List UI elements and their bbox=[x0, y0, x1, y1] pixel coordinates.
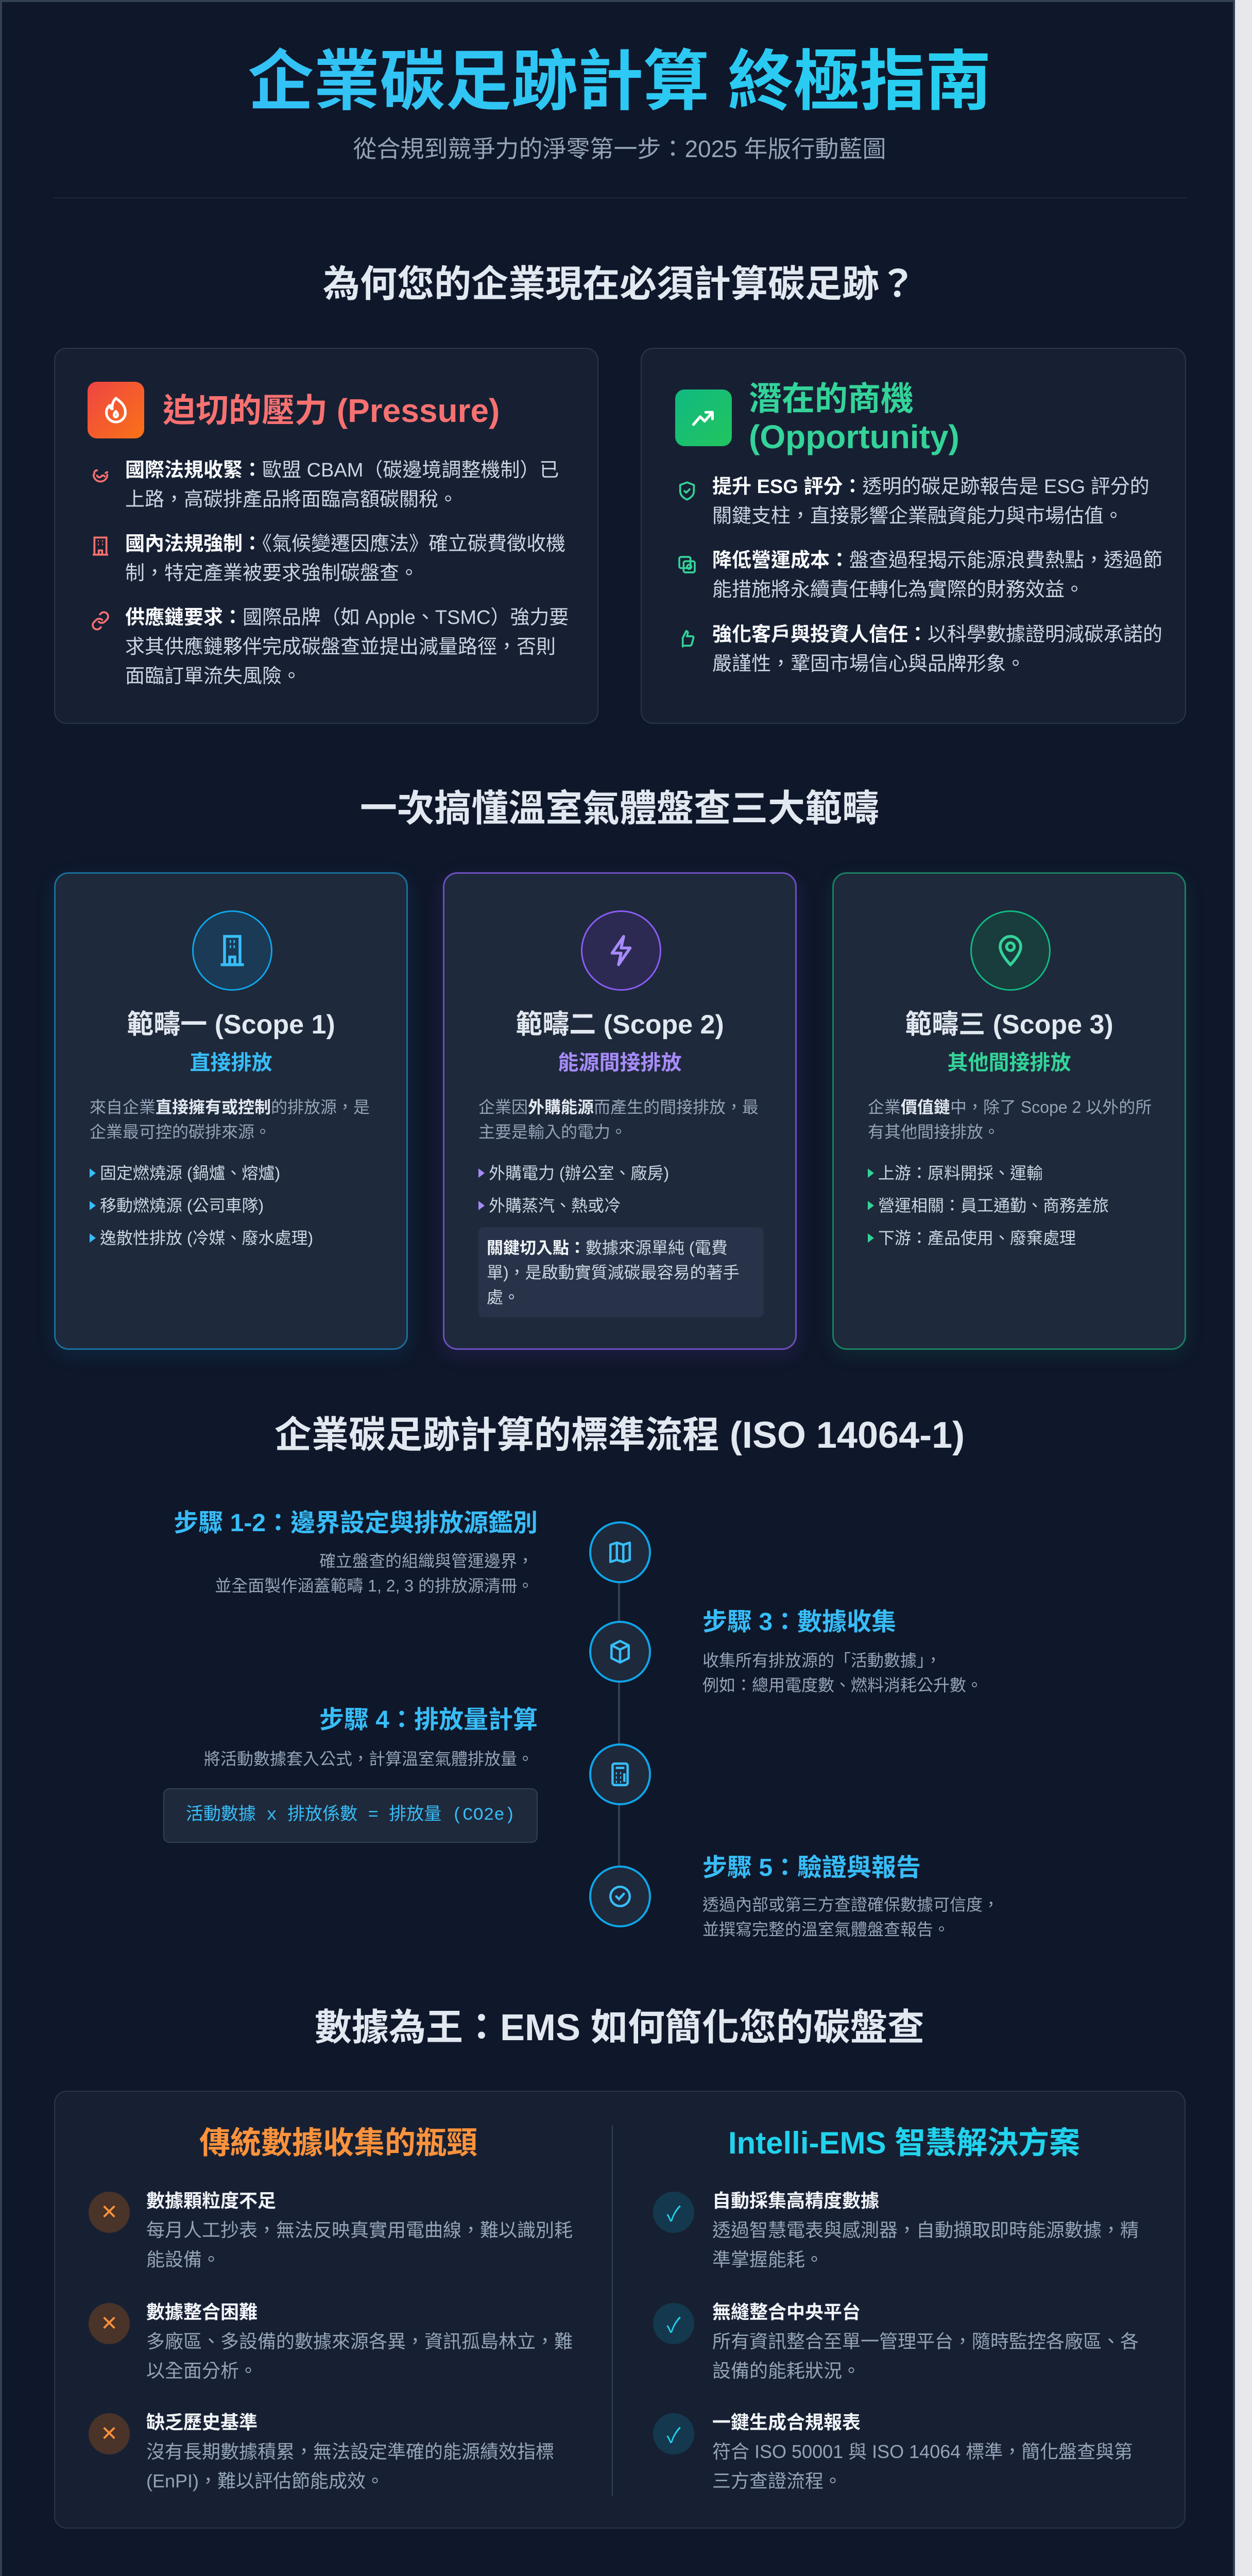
formula box bbox=[163, 1788, 538, 1843]
panel title: (Opportunity) bbox=[749, 418, 959, 455]
item: trust: 強化客戶與投資人信任：以科學數據證明減碳承諾的嚴謹性，鞏固市場信心與品牌形象。 bbox=[712, 624, 1162, 675]
bottleneck 2: ✕ bbox=[100, 2312, 118, 2335]
bottleneck 3 bbox=[89, 2412, 554, 2492]
panel: EMS comparison bbox=[54, 2091, 1186, 2529]
scope 1 bullets: 固定燃燒源 (鍋爐、熔爐) bbox=[100, 1164, 280, 1182]
solution 3: 一鍵生成合規報表 bbox=[712, 2412, 861, 2433]
bottleneck 3: 缺乏歷史基準 bbox=[146, 2412, 258, 2433]
item: domestic: 國內法規強制：《氣候變遷因應法》確立碳費徵收機制，特定產業被要求強制碳盤查。 bbox=[125, 533, 565, 584]
step 5: 透過內部或第三方查證確保數據可信度， bbox=[702, 1895, 999, 1914]
panel title bbox=[749, 380, 959, 455]
panel: scope 1: 直接排放 bbox=[190, 1052, 272, 1074]
scope 2 bullets: 外購蒸汽、熱或冷 bbox=[489, 1196, 621, 1215]
bottleneck 2: 多廠區、多設備的數據來源各異，資訊孤島林立，難以全面分析。 bbox=[146, 2331, 573, 2381]
subtitle: 從合規到競爭力的淨零第一步：2025 年版行動藍圖 bbox=[353, 135, 886, 162]
scope 1 title: 範疇一 (Scope 1) bbox=[127, 1010, 335, 1040]
item: international: 國際法規收緊：歐盟 CBAM（碳邊境調整機制）已上路，高碳排產品將面臨高額碳關稅。 bbox=[125, 460, 559, 511]
solution 1: 透過智慧電表與感測器，自動擷取即時能源數據，精準掌握能耗。 bbox=[712, 2219, 1139, 2270]
panel: scope 2 bbox=[443, 872, 797, 1350]
left title: 傳統數據收集的瓶頸 bbox=[199, 2126, 477, 2160]
solution 1: ✓ bbox=[666, 2203, 681, 2226]
heading: why: 為何您的企業現在必須計算碳足跡？ bbox=[323, 264, 916, 305]
step 3: 收集所有排放源的「活動數據」， bbox=[702, 1651, 941, 1670]
step 1-2: 確立盤查的組織與管運邊界， bbox=[319, 1552, 534, 1570]
solution 2: 所有資訊整合至單一管理平台，隨時監控各廠區、各設備的能耗狀況。 bbox=[712, 2331, 1139, 2381]
bottleneck 1: 每月人工抄表，無法反映真實用電曲線，難以識別耗能設備。 bbox=[146, 2219, 573, 2270]
step 3: 例如：總用電度數、燃料消耗公升數。 bbox=[702, 1676, 983, 1694]
panel: scope 3 bbox=[832, 872, 1186, 1350]
scope 2 bullets bbox=[478, 1164, 669, 1215]
icon: trend up bbox=[675, 389, 732, 446]
panel: scope 1: 來自企業直接擁有或控制的排放源，是企業最可控的碳排來源。 bbox=[90, 1098, 370, 1141]
panel title: 潛在的商機 bbox=[749, 380, 914, 417]
bottleneck 1 bbox=[89, 2190, 573, 2270]
heading: scopes: 一次搞懂溫室氣體盤查三大範疇 bbox=[360, 788, 879, 829]
icon: lightning bbox=[581, 910, 661, 991]
icon: building bbox=[192, 910, 272, 991]
heading: EMS: 數據為王：EMS 如何簡化您的碳盤查 bbox=[315, 2007, 924, 2048]
solution 3: ✓ bbox=[666, 2425, 681, 2447]
node 4: check bbox=[589, 1866, 651, 1927]
panel: scope 2: 能源間接排放 bbox=[558, 1052, 682, 1074]
scope 2 title: 範疇二 (Scope 2) bbox=[516, 1010, 724, 1040]
icon: fire bbox=[88, 382, 144, 438]
solution 2: 無縫整合中央平台 bbox=[712, 2301, 861, 2323]
step 1-2 bbox=[174, 1510, 538, 1595]
step 5: 步驟 5：驗證與報告 bbox=[702, 1854, 921, 1882]
panel: opportunity bbox=[641, 348, 1186, 724]
solution 3: 符合 ISO 50001 與 ISO 14064 標準，簡化盤查與第三方查證流程。 bbox=[712, 2441, 1133, 2492]
bottleneck 2: 數據整合困難 bbox=[146, 2301, 258, 2323]
node 2: box bbox=[589, 1621, 651, 1683]
scope 3 bullets: 營運相關：員工通勤、商務差旅 bbox=[878, 1196, 1109, 1215]
scope 1 bullets: 逸散性排放 (冷媒、廢水處理) bbox=[100, 1229, 313, 1247]
solution 2: ✓ bbox=[666, 2314, 681, 2337]
timeline bbox=[589, 1521, 651, 1927]
item: ESG: 提升 ESG 評分：透明的碳足跡報告是 ESG 評分的關鍵支柱，直接影響企業融資能力與市場估值。 bbox=[712, 476, 1150, 527]
scope 2 bullets: 外購電力 (辦公室、廠房) bbox=[489, 1164, 669, 1182]
solution 3 bbox=[653, 2412, 1133, 2492]
step 4: 步驟 4：排放量計算 bbox=[319, 1706, 538, 1734]
panel: scope 3: 企業價值鏈中，除了 Scope 2 以外的所有其他間接排放。 bbox=[868, 1098, 1152, 1141]
item: supply chain: 供應鏈要求：國際品牌（如 Apple、TSMC）強力要求其供應鏈夥伴完成碳盤查並提出減量路徑，否則面臨訂單流失風險。 bbox=[125, 607, 569, 687]
panel: scope 3: 其他間接排放 bbox=[948, 1052, 1071, 1074]
panel: scope 2: 企業因外購能源而產生的間接排放，最主要是輸入的電力。 bbox=[478, 1098, 759, 1141]
step 5: 並撰寫完整的溫室氣體盤查報告。 bbox=[702, 1920, 950, 1939]
bottleneck 1: ✕ bbox=[100, 2201, 118, 2224]
panel: scope 1 bbox=[54, 872, 408, 1350]
step 5 bbox=[702, 1854, 999, 1939]
right title: Intelli-EMS 智慧解決方案 bbox=[728, 2126, 1080, 2160]
node 3: calculator bbox=[589, 1743, 651, 1805]
bottleneck 2 bbox=[89, 2301, 573, 2381]
scope 1 bullets: 移動燃燒源 (公司車隊) bbox=[100, 1196, 264, 1215]
title bbox=[2, 46, 1237, 117]
step 4: 將活動數據套入公式，計算溫室氣體排放量。 bbox=[204, 1750, 534, 1768]
callout: key entry point: 關鍵切入點：數據來源單純 (電費單)，是啟動實質減碳最容易的著手處。 bbox=[487, 1239, 740, 1307]
step 3 bbox=[702, 1608, 983, 1694]
scope 3 title: 範疇三 (Scope 3) bbox=[905, 1010, 1113, 1040]
bottleneck 1: 數據顆粒度不足 bbox=[146, 2190, 276, 2211]
scope 3 bullets bbox=[868, 1164, 1109, 1247]
solution 2 bbox=[653, 2301, 1139, 2381]
bottleneck 3: 沒有長期數據積累，無法設定準確的能源績效指標 (EnPI)，難以評估節能成效。 bbox=[146, 2441, 554, 2492]
scope 3 bullets: 上游：原料開採、運輸 bbox=[878, 1164, 1043, 1182]
solution 1: 自動採集高精度數據 bbox=[712, 2190, 879, 2211]
callout: key entry point bbox=[478, 1227, 764, 1317]
bottleneck 3: ✕ bbox=[100, 2422, 118, 2445]
panel title: 迫切的壓力 (Pressure) bbox=[163, 392, 500, 429]
step 1-2: 並全面製作涵蓋範疇 1, 2, 3 的排放源清冊。 bbox=[215, 1577, 534, 1595]
item: cost: 降低營運成本：盤查過程揭示能源浪費熱點，透過節能措施將永續責任轉化為實際的財務效益。 bbox=[712, 550, 1162, 601]
solution 1 bbox=[653, 2190, 1139, 2270]
step 1-2: 步驟 1-2：邊界設定與排放源鑑別 bbox=[174, 1510, 538, 1537]
panel: pressure bbox=[54, 348, 598, 724]
step 3: 步驟 3：數據收集 bbox=[702, 1608, 896, 1636]
title: 企業碳足跡計算 終極指南 bbox=[248, 45, 991, 118]
node 1: map bbox=[589, 1521, 651, 1583]
scope 3 bullets: 下游：產品使用、廢棄處理 bbox=[878, 1229, 1076, 1247]
scope 1 bullets bbox=[90, 1164, 313, 1247]
heading: process: 企業碳足跡計算的標準流程 (ISO 14064-1) bbox=[275, 1415, 965, 1456]
formula box: 活動數據 x 排放係數 = 排放量 (CO2e) bbox=[186, 1806, 515, 1825]
step 4 bbox=[163, 1706, 538, 1843]
icon: location bbox=[970, 910, 1051, 991]
